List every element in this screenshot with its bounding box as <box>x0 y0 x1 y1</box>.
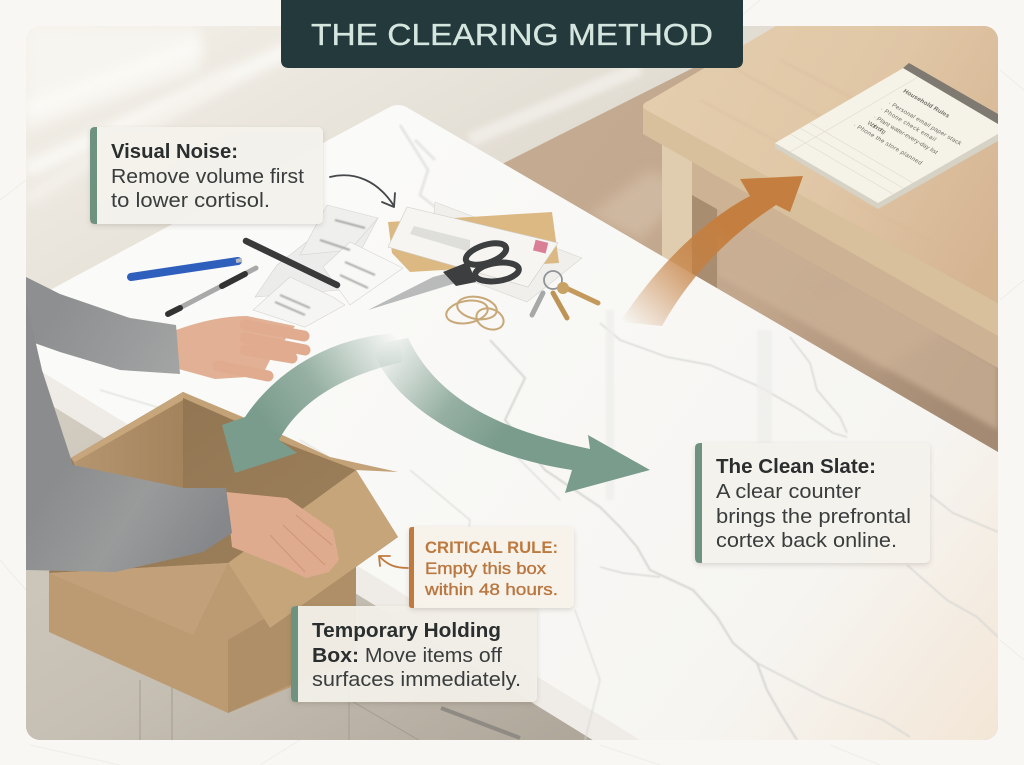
callout: temporary holding box <box>291 606 537 702</box>
callout: temporary holding box: Temporary Holding <box>312 620 501 642</box>
callout: visual noise: Visual Noise: <box>111 141 238 163</box>
wooden floor <box>498 68 998 460</box>
scissors <box>368 239 520 310</box>
cardboard box <box>49 392 398 713</box>
arrow: green to box <box>222 333 402 473</box>
notepad on table: Household Rules <box>902 89 951 120</box>
notepad on table <box>775 63 998 209</box>
pens <box>131 241 337 314</box>
callout: critical rule <box>409 527 574 608</box>
window reflections <box>608 330 771 394</box>
callout: critical rule: Empty this box <box>425 559 547 578</box>
callout: the clean slate: cortex back online. <box>716 529 897 552</box>
marble counter top <box>26 105 998 740</box>
callout: the clean slate: The Clean Slate: <box>716 456 876 478</box>
title banner: THE CLEARING METHOD <box>311 17 713 52</box>
notepad on table: · Phone the store planned <box>852 123 923 167</box>
wooden side table <box>643 26 998 430</box>
arrow: critical rule pointer <box>379 556 408 568</box>
notepad on table: · Phone check email <box>879 107 937 144</box>
callout: critical rule: within 48 hours. <box>424 580 558 599</box>
callout: temporary holding box: surfaces immediately. <box>312 668 521 691</box>
notepad on table: Worth noting <box>866 121 887 136</box>
callout: the clean slate: A clear counter <box>716 480 861 503</box>
callout: visual noise <box>90 127 323 224</box>
callout: temporary holding box: Box: Move items off <box>312 644 502 667</box>
keys <box>532 271 598 318</box>
title banner <box>281 0 743 68</box>
arrow: orange to table <box>620 176 803 326</box>
lower arm and hand <box>26 340 339 578</box>
callout: the clean slate <box>695 443 930 563</box>
upper arm and hand <box>26 277 305 379</box>
callout: critical rule: CRITICAL RULE: <box>425 539 558 557</box>
notepad on table: · Personal email paper stack <box>887 101 963 148</box>
envelopes <box>388 202 582 302</box>
cabinets under counter <box>26 407 592 740</box>
arrow: green to clean counter <box>372 338 650 493</box>
callout: visual noise: to lower cortisol. <box>111 189 270 212</box>
arrow: visual noise pointer <box>330 175 395 207</box>
notepad on table: · Plant water-every-day list <box>872 115 939 156</box>
marble counter front edge <box>43 372 640 740</box>
callout: the clean slate: brings the prefrontal <box>716 505 911 528</box>
receipts <box>253 205 403 327</box>
rubber bands <box>445 296 505 331</box>
marble veins <box>100 125 998 740</box>
callout: visual noise: Remove volume first <box>111 165 304 188</box>
